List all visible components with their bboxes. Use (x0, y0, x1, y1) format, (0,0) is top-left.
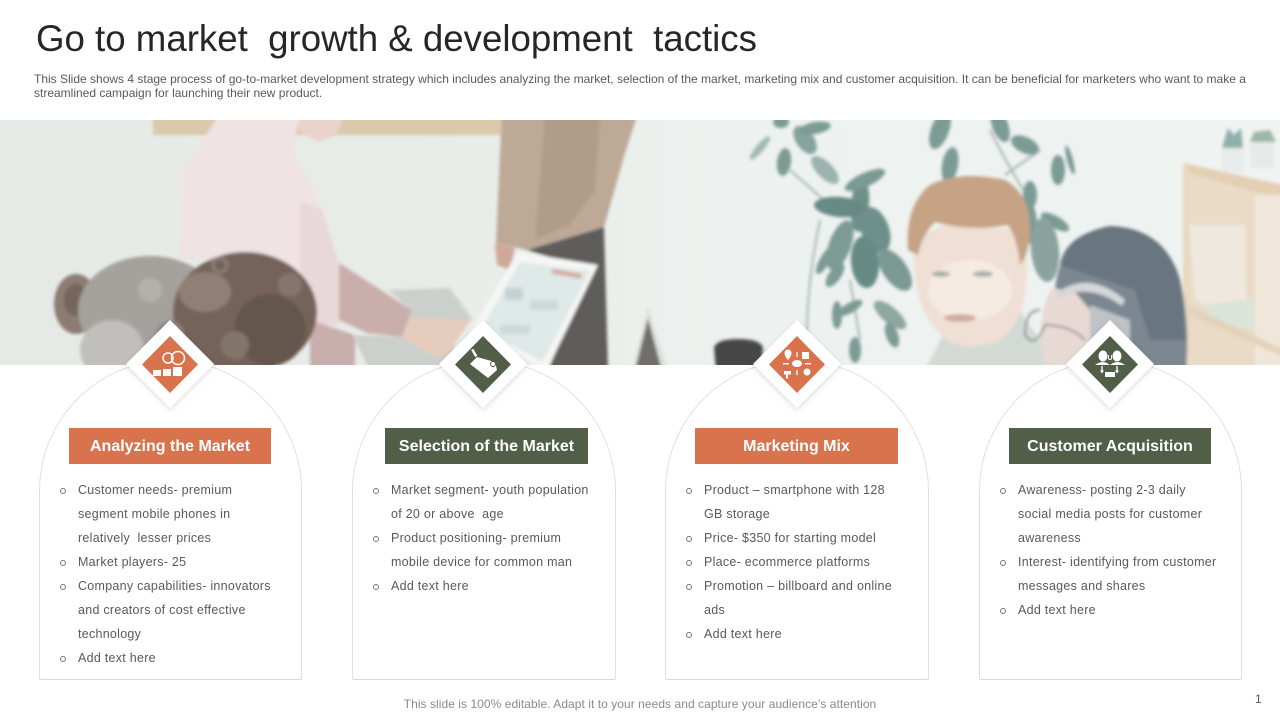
title: Go to market growth & development tactics (36, 18, 757, 59)
text block: customer acquisition bullets (1000, 483, 1216, 617)
picture frame (153, 116, 503, 135)
panel: customer acquisition (979, 360, 1242, 680)
text block: marketing mix bullets: GB storage (704, 507, 770, 521)
text block: customer acquisition bullets: Interest- identifying from customer (1018, 555, 1216, 569)
heading: customer acquisition (1009, 428, 1211, 464)
text block: selection of the market bullets: Product positioning- premium (391, 531, 561, 545)
hand (402, 317, 470, 360)
tablet (469, 252, 598, 370)
text block: analyzing the market bullets: technology (78, 627, 141, 641)
text block: selection of the market bullets: Add text here (391, 579, 469, 593)
text block: analyzing the market bullets: Customer needs- premium (78, 483, 232, 497)
text block: marketing mix bullets: Price- $350 for starting model (704, 531, 876, 545)
plant leaves (747, 105, 1077, 363)
text block: marketing mix bullets: Place- ecommerce platforms (704, 555, 870, 569)
text block: analyzing the market bullets: segment mobile phones in (78, 507, 230, 521)
page number: 1 (1255, 692, 1262, 706)
heading: marketing mix: Marketing Mix (743, 438, 850, 455)
grey trousers (352, 288, 473, 370)
text block: selection of the market bullets: mobile device for common man (391, 555, 572, 569)
icon: marketing mix diamond (753, 320, 841, 410)
pots (1222, 148, 1244, 172)
shelf (1183, 163, 1280, 370)
heading: analyzing the market (69, 428, 271, 464)
heading: analyzing the market: Analyzing the Market (90, 438, 250, 455)
plant stems (790, 130, 1040, 370)
text block: customer acquisition bullets: Awareness- posting 2-3 daily (1018, 483, 1186, 497)
text block: customer acquisition bullets: awareness (1018, 531, 1081, 545)
panel: marketing mix (665, 360, 929, 680)
text block: marketing mix bullets: Product – smartphone with 128 (704, 483, 885, 497)
text block: analyzing the market bullets: and creators of cost effective (78, 603, 246, 617)
man smiling: hair (908, 176, 1030, 265)
text block: customer acquisition bullets: social media posts for customer (1018, 507, 1202, 521)
laptop (632, 306, 668, 370)
heading: selection of the market: Selection of the Market (399, 438, 574, 455)
text block: selection of the market bullets: of 20 or above age (391, 507, 504, 521)
text block: analyzing the market bullets (60, 483, 271, 665)
man smiling: face (913, 225, 1027, 347)
icon: customer acquisition diamond (1066, 320, 1154, 410)
text block: analyzing the market bullets: Company capabilities- innovators (78, 579, 271, 593)
text block: customer acquisition bullets: messages and shares (1018, 579, 1145, 593)
text block: marketing mix bullets: ads (704, 603, 725, 617)
text block: selection of the market bullets (373, 483, 589, 593)
icon: market analysis diamond (126, 320, 214, 410)
text block: marketing mix bullets: Add text here (704, 627, 782, 641)
text block: marketing mix bullets (686, 483, 892, 641)
other man's head (1040, 226, 1187, 370)
icon: market selection diamond (439, 320, 527, 410)
text block: marketing mix bullets: Promotion – billboard and online (704, 579, 892, 593)
man smiling: shirt (925, 303, 1048, 370)
text block: analyzing the market bullets: Market players- 25 (78, 555, 186, 569)
coffee cup (714, 339, 763, 370)
pink sweater woman (296, 116, 345, 142)
text block: analyzing the market bullets: relatively lesser prices (78, 531, 211, 545)
heading: customer acquisition: Customer Acquisition (1027, 438, 1193, 455)
hero photo: office team meeting (0, 120, 1280, 365)
brown jacket man (496, 116, 637, 250)
footer note: This slide is 100% editable. Adapt it to your needs and capture your audience’s attention (404, 697, 876, 711)
subtitle description: This Slide shows 4 stage process of go-to-market development strategy which includes analyzing the market, selection of the market, marketing mix and customer acquisition. It can be beneficial for marketers who want to make a streamlined campaign for launching their new product. (34, 72, 1246, 100)
text block: selection of the market bullets: Market segment- youth population (391, 483, 589, 497)
text block: analyzing the market bullets: Add text here (78, 651, 156, 665)
heading: marketing mix (695, 428, 898, 464)
text block: customer acquisition bullets: Add text here (1018, 603, 1096, 617)
panel: selection of the market (352, 360, 616, 680)
heading: selection of the market (385, 428, 588, 464)
panel: analyzing the market (39, 360, 302, 680)
curly hair woman (54, 274, 98, 334)
man smiling: eyes and mouth (932, 271, 950, 277)
